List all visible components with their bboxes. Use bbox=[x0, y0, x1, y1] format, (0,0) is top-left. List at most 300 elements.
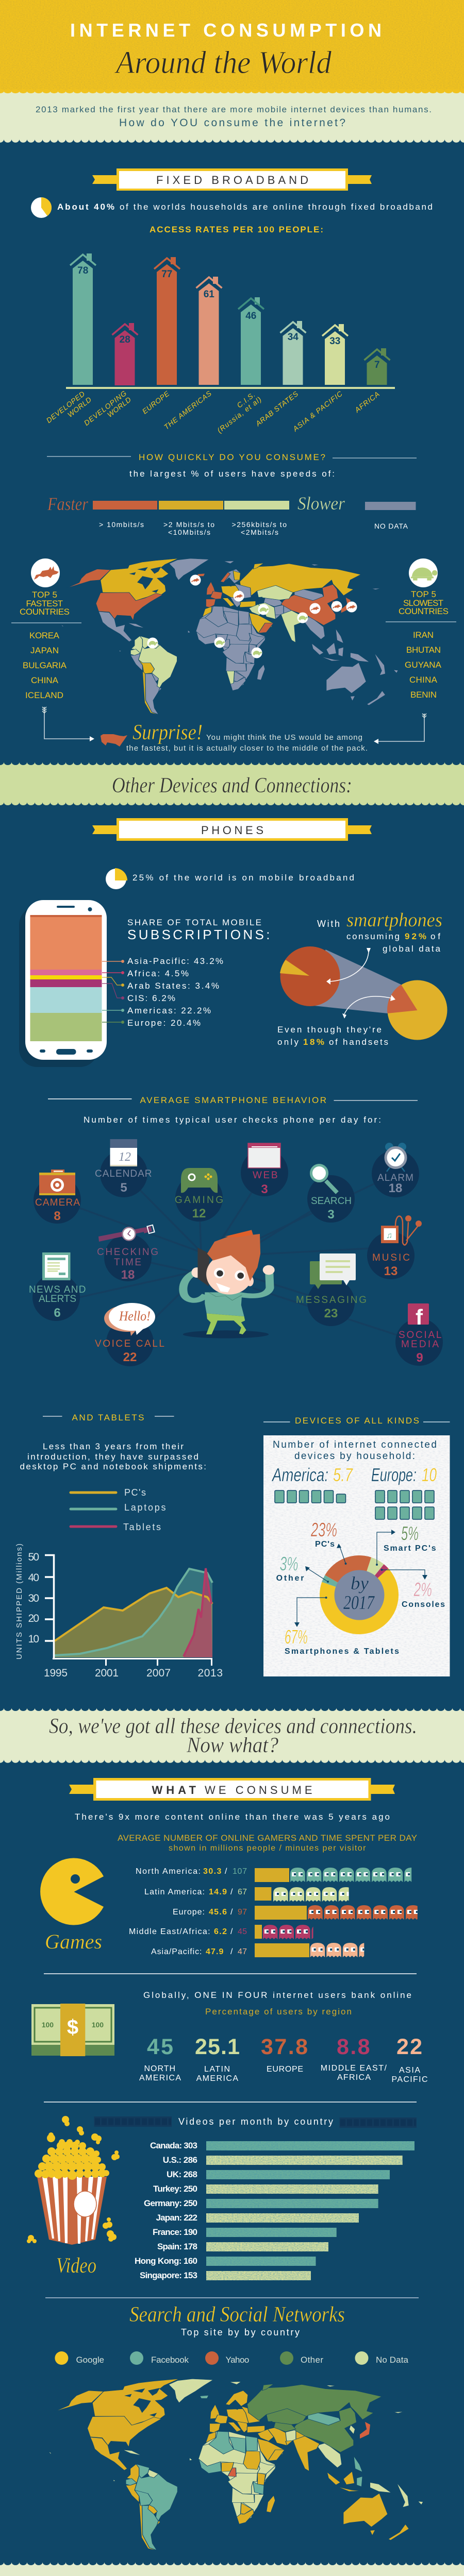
item: web count: 3 bbox=[261, 1182, 268, 1196]
banking headings bbox=[143, 1990, 411, 2016]
chart: units shipped bbox=[15, 1544, 223, 1679]
smartphones text: global data bbox=[383, 944, 441, 954]
panel heading: Number of internet connected bbox=[273, 1439, 437, 1450]
icon: calendar bbox=[110, 1139, 137, 1166]
smartphones text: consuming bbox=[346, 931, 400, 941]
row: north america: 107 bbox=[233, 1867, 247, 1876]
row: middle east and africa: Middle East/Africa: bbox=[129, 1927, 210, 1936]
axis labels: THE AMERICAS bbox=[162, 389, 213, 431]
speed legend: <2Mbits/s bbox=[241, 528, 278, 536]
house bar: africa bbox=[364, 348, 390, 385]
games label: Games bbox=[45, 1930, 102, 1953]
subscriptions legend: Africa: 4.5% bbox=[127, 969, 189, 978]
house bar: arab states: 34 bbox=[288, 332, 299, 343]
icon: rabbit bbox=[31, 558, 60, 587]
house bar: europe bbox=[154, 257, 180, 385]
band: footer divider bbox=[0, 2562, 464, 2576]
icon: message bubbles bbox=[310, 1253, 356, 1289]
chart: units shipped: 20 bbox=[28, 1613, 39, 1624]
smartphones text: 92% bbox=[405, 931, 426, 941]
illustration: popcorn bbox=[27, 2116, 120, 2245]
smartphones text: With bbox=[317, 919, 340, 929]
item: alarm count: ALARM bbox=[377, 1173, 413, 1183]
item: checking time count bbox=[97, 1247, 158, 1282]
panel: top 5 slowest: BENIN bbox=[410, 690, 437, 700]
house bar: developed world: 78 bbox=[77, 265, 88, 276]
banner: phones: PHONES bbox=[201, 824, 263, 837]
chart: videos per month: Hong Kong: 160 bbox=[135, 2256, 197, 2266]
america and europe counts: 5.7 bbox=[333, 1464, 354, 1485]
row: europe: / bbox=[230, 1908, 233, 1917]
tablets text: desktop PC and notebook shipments: bbox=[20, 1462, 206, 1471]
axis labels: WORLD bbox=[66, 395, 93, 419]
chart: videos per month: U.S.: 286 bbox=[163, 2155, 197, 2165]
heading: search and social: Top site by by country bbox=[181, 2327, 300, 2337]
item: checking time count: 18 bbox=[121, 1268, 135, 1282]
row: asia pacific: 47.9 bbox=[206, 1947, 223, 1956]
item: messaging count: MESSAGING bbox=[296, 1295, 367, 1306]
panel: top 5 slowest: BHUTAN bbox=[406, 645, 441, 655]
banking stats bbox=[147, 2035, 422, 2059]
icon: news bbox=[42, 1252, 70, 1280]
house bar: asia and pacific: 33 bbox=[329, 336, 340, 347]
speed legend: Faster bbox=[47, 494, 89, 514]
tablets text: Less than 3 years from their bbox=[43, 1442, 184, 1451]
chart: access rates houses bbox=[45, 253, 395, 434]
donut callouts: Consoles bbox=[402, 1600, 445, 1609]
chart: units shipped: 30 bbox=[28, 1592, 39, 1604]
device icons bbox=[275, 1490, 434, 1519]
house bar: the americas: 61 bbox=[204, 289, 214, 300]
behavior subtitle: Number of times typical user checks phone per day for: bbox=[84, 1115, 381, 1125]
chart: units shipped: 2007 bbox=[146, 1667, 171, 1679]
chart: units shipped: 2013 bbox=[198, 1667, 223, 1679]
america and europe counts: 10 bbox=[422, 1464, 437, 1485]
icon: camera bbox=[39, 1170, 75, 1195]
chart: units shipped: 1995 bbox=[44, 1667, 68, 1679]
film strips bbox=[94, 2116, 417, 2128]
panel heading: devices by household: bbox=[294, 1451, 415, 1462]
banking regions: LATIN bbox=[204, 2065, 230, 2074]
row: europe: 97 bbox=[238, 1908, 247, 1917]
legend: top sites bbox=[55, 2351, 409, 2365]
panel: devices of all kinds bbox=[263, 1435, 450, 1676]
banking regions: EUROPE bbox=[267, 2065, 303, 2074]
row: asia pacific: 47 bbox=[238, 1947, 247, 1956]
banking regions: PACIFIC bbox=[392, 2075, 428, 2084]
subscriptions legend: CIS: 6.2% bbox=[127, 993, 175, 1003]
chart: videos per month: Canada: 303 bbox=[150, 2141, 197, 2150]
item: news and alerts count: 6 bbox=[54, 1306, 61, 1320]
intro text bbox=[36, 105, 432, 129]
title: Around the World bbox=[114, 45, 332, 80]
axis labels bbox=[45, 389, 381, 434]
america and europe counts: America: bbox=[271, 1464, 328, 1485]
banking regions: AMERICA bbox=[139, 2074, 181, 2082]
item: calendar count: CALENDAR bbox=[95, 1168, 152, 1179]
banner: what we consume bbox=[69, 1778, 395, 1801]
banking headings: Globally, ONE IN FOUR internet users bank online bbox=[143, 1990, 411, 2000]
icon: pacman bbox=[40, 1858, 104, 1925]
icon: music player bbox=[381, 1215, 422, 1245]
banking regions: ASIA bbox=[399, 2066, 420, 2075]
icon: 40% pie bbox=[31, 197, 52, 218]
banner: what we consume: WHAT bbox=[152, 1784, 196, 1797]
video label: Video bbox=[56, 2254, 96, 2278]
panel: top 5 fastest: KOREA bbox=[29, 631, 60, 640]
icon: hello speech bubble: Hello! bbox=[119, 1309, 151, 1324]
panel: top 5 slowest: IRAN bbox=[413, 630, 434, 640]
panel: top 5 slowest: COUNTRIES bbox=[399, 606, 449, 616]
icon: money stack: 100 bbox=[92, 2021, 104, 2029]
donut callouts: 67% bbox=[285, 1626, 308, 1648]
heading: search and social: Search and Social Networks bbox=[129, 2303, 345, 2327]
icon: money stack bbox=[31, 2004, 114, 2056]
item: voice call count bbox=[95, 1338, 164, 1364]
band: other devices: Other Devices and Connections: bbox=[112, 774, 352, 798]
subscriptions heading bbox=[127, 918, 270, 942]
axis labels: C.I.S. bbox=[235, 390, 257, 410]
banking regions: AFRICA bbox=[337, 2073, 371, 2082]
item: web count bbox=[253, 1170, 277, 1196]
title bbox=[70, 20, 382, 80]
banner: fixed broadband bbox=[92, 168, 372, 191]
heading: search and social bbox=[129, 2303, 345, 2337]
panel: top 5 fastest bbox=[11, 558, 81, 700]
item: voice call count: VOICE CALL bbox=[95, 1338, 164, 1349]
map markers: rabbits and turtles bbox=[147, 575, 357, 658]
callout: surprise bbox=[126, 721, 368, 753]
banner: what we consume: WE CONSUME bbox=[205, 1784, 312, 1797]
banking stats: 8.8 bbox=[337, 2035, 370, 2059]
legend: top sites: Facebook bbox=[151, 2355, 189, 2365]
mobile broadband stat: 25% of the world is on mobile broadband bbox=[132, 873, 354, 883]
arrow: fastest to surprise bbox=[42, 707, 94, 741]
callout: surprise: Surprise! bbox=[132, 721, 203, 744]
band: now what: Now what? bbox=[186, 1734, 278, 1757]
heading: smartphone behavior: AVERAGE SMARTPHONE BEHAVIOR bbox=[140, 1095, 326, 1105]
illustration: man on the phone bbox=[183, 1230, 275, 1338]
speed legend: >256kbits/s to bbox=[232, 520, 287, 529]
chart legend: Laptops bbox=[124, 1502, 166, 1513]
house bar: cis: 46 bbox=[245, 311, 256, 321]
item: calendar count: 5 bbox=[120, 1181, 127, 1195]
subscriptions legend bbox=[102, 956, 223, 1028]
row: north america bbox=[136, 1867, 419, 1882]
heading: and tablets: AND TABLETS bbox=[72, 1413, 144, 1422]
item: music count bbox=[372, 1252, 410, 1278]
subscriptions legend: Arab States: 3.4% bbox=[127, 981, 219, 991]
chart: videos per month: Spain: 178 bbox=[157, 2242, 197, 2251]
axis labels: AFRICA bbox=[353, 390, 381, 414]
speed legend: > 10mbits/s bbox=[99, 520, 144, 529]
icon: US bbox=[101, 734, 127, 747]
donut callouts: 5% bbox=[401, 1523, 419, 1545]
house bar: developing world: 28 bbox=[120, 334, 130, 345]
speed legend: >2 Mbits/s to bbox=[163, 520, 214, 529]
chart: by 2017 donut: by bbox=[351, 1573, 369, 1594]
donut callouts: 2% bbox=[413, 1579, 432, 1601]
access rates heading: ACCESS RATES PER 100 PEOPLE: bbox=[150, 225, 323, 234]
banking regions: AMERICA bbox=[196, 2074, 238, 2083]
subscriptions heading: SHARE OF TOTAL MOBILE bbox=[127, 918, 261, 927]
header band bbox=[0, 0, 464, 139]
chart: units shipped: UNITS SHIPPED (Millions) bbox=[15, 1544, 24, 1659]
donut callouts: Other bbox=[276, 1574, 304, 1583]
row: north america: / bbox=[225, 1867, 227, 1876]
smartphones text bbox=[317, 909, 442, 954]
item: gaming count: 12 bbox=[192, 1207, 206, 1221]
banking stats: 25.1 bbox=[195, 2035, 240, 2059]
speed legend: NO DATA bbox=[374, 522, 408, 530]
item: gaming count bbox=[175, 1195, 223, 1221]
chart: units shipped: 40 bbox=[28, 1572, 39, 1584]
row: latin america bbox=[144, 1887, 353, 1902]
panel: top 5 fastest: CHINA bbox=[31, 675, 59, 685]
chart: videos per month bbox=[135, 2141, 415, 2280]
band: now what bbox=[0, 1708, 464, 1759]
row: latin america: / bbox=[230, 1888, 233, 1896]
chart: videos per month: Singapore: 153 bbox=[140, 2270, 197, 2280]
icon: money stack: 100 bbox=[42, 2021, 54, 2029]
chart: videos per month: Germany: 250 bbox=[144, 2198, 197, 2208]
house bar: africa: 7 bbox=[374, 360, 380, 370]
connection lines bbox=[56, 1173, 419, 1343]
item: gaming count: GAMING bbox=[175, 1195, 223, 1206]
donut callouts bbox=[276, 1519, 445, 1656]
panel: top 5 fastest: JAPAN bbox=[30, 646, 59, 655]
item: alarm count bbox=[377, 1173, 413, 1195]
chart: videos per month: Japan: 222 bbox=[156, 2213, 197, 2223]
heading: devices of all kinds: DEVICES OF ALL KINDS bbox=[295, 1416, 419, 1426]
house bar: asia and pacific bbox=[322, 324, 348, 385]
item: web count: WEB bbox=[253, 1170, 277, 1181]
axis labels: ARAB STATES bbox=[254, 389, 300, 428]
callout: surprise: You might think the US would be among bbox=[206, 733, 362, 742]
banking headings: Percentage of users by region bbox=[205, 2007, 352, 2016]
house bar: developed world bbox=[70, 253, 96, 385]
panel: top 5 slowest: TOP 5 bbox=[411, 589, 436, 599]
panel: top 5 slowest: CHINA bbox=[409, 675, 438, 685]
subscriptions legend: Asia-Pacific: 43.2% bbox=[127, 956, 223, 966]
chart: data vs handsets cone bbox=[280, 946, 448, 1040]
intro text: 2013 marked the first year that there are more mobile internet devices than humans. bbox=[36, 105, 432, 114]
callout: surprise: the fastest, but it is actually closer to the middle of the pack. bbox=[126, 744, 368, 753]
chart: units shipped: 50 bbox=[28, 1551, 39, 1563]
gamers heading bbox=[118, 1833, 417, 1853]
row: latin america: 67 bbox=[238, 1888, 247, 1896]
icon: watch bbox=[98, 1225, 155, 1242]
chart: gamers by region bbox=[129, 1867, 421, 1957]
item: alarm count: 18 bbox=[389, 1181, 402, 1195]
arrow: slowest to surprise bbox=[374, 714, 426, 744]
item: messaging count bbox=[296, 1295, 367, 1320]
item: camera count: 8 bbox=[54, 1209, 61, 1223]
axis labels: (Russia, et al) bbox=[216, 395, 263, 434]
tablets text bbox=[20, 1442, 206, 1471]
chart: by 2017 donut: 2017 bbox=[343, 1592, 375, 1614]
icon: alarm clock bbox=[385, 1143, 406, 1172]
row: middle east and africa: / bbox=[230, 1927, 233, 1936]
handset text: of handsets bbox=[329, 1037, 388, 1047]
item: social media count bbox=[399, 1330, 441, 1365]
speed subtitle: the largest % of users have speeds of: bbox=[129, 469, 335, 479]
gamers heading: shown in millions people / minutes per visitor bbox=[169, 1844, 366, 1853]
fixed broadband stat: About 40% bbox=[57, 202, 114, 212]
speed legend: Slower bbox=[297, 493, 345, 514]
item: news and alerts count: NEWS AND bbox=[29, 1284, 86, 1295]
axis labels: EUROPE bbox=[141, 389, 171, 415]
icon: facebook: f bbox=[416, 1305, 423, 1329]
icon: web window bbox=[248, 1143, 280, 1168]
row: north america: 30.3 bbox=[203, 1867, 221, 1876]
item: social media count: SOCIAL bbox=[399, 1330, 441, 1341]
legend: top sites: No Data bbox=[376, 2355, 409, 2365]
axis labels: DEVELOPING bbox=[82, 389, 128, 427]
row: middle east and africa: 45 bbox=[238, 1927, 247, 1936]
axis labels: ASIA & PACIFIC bbox=[291, 389, 344, 433]
speed legend: <10Mbits/s bbox=[168, 528, 210, 536]
icon: facebook bbox=[408, 1303, 429, 1329]
item: music count: MUSIC bbox=[372, 1252, 410, 1263]
row: north america: North America: bbox=[136, 1867, 201, 1876]
banking regions bbox=[139, 2064, 428, 2084]
item: voice call count: 22 bbox=[123, 1350, 137, 1364]
illustration: phone with subscription bars bbox=[19, 900, 107, 1067]
band: now what: So, we've got all these devices and connections. bbox=[49, 1715, 417, 1738]
row: middle east and africa bbox=[129, 1925, 326, 1939]
row: middle east and africa: 6.2 bbox=[214, 1927, 227, 1936]
donut callouts: Smartphones & Tablets bbox=[285, 1647, 399, 1656]
banking regions: MIDDLE EAST/ bbox=[321, 2064, 387, 2073]
america and europe counts: Europe: bbox=[371, 1464, 417, 1485]
chart: videos per month: France: 190 bbox=[153, 2227, 197, 2237]
axis labels: DEVELOPED bbox=[45, 389, 86, 425]
handset text bbox=[277, 1025, 388, 1047]
item: search count: 3 bbox=[327, 1208, 335, 1222]
item: camera count bbox=[35, 1197, 80, 1223]
donut callouts: 23% bbox=[310, 1519, 337, 1541]
legend: top sites: Yahoo bbox=[226, 2355, 249, 2365]
tablets text: introduction, they have surpassed bbox=[27, 1452, 198, 1462]
banner: phones bbox=[92, 818, 372, 841]
panel: top 5 slowest bbox=[386, 558, 456, 700]
icon: magnifier bbox=[311, 1165, 337, 1193]
banking regions: NORTH bbox=[144, 2064, 175, 2073]
axis labels: WORLD bbox=[106, 395, 132, 419]
chart legend bbox=[71, 1487, 166, 1532]
panel: top 5 fastest: TOP 5 bbox=[32, 590, 57, 600]
item: calendar count bbox=[95, 1168, 152, 1195]
content stat: There's 9x more content online than there was 5 years ago bbox=[75, 1812, 390, 1822]
banking stats: 37.8 bbox=[261, 2035, 308, 2059]
panel: top 5 slowest: GUYANA bbox=[405, 660, 442, 670]
panel: top 5 fastest: BULGARIA bbox=[23, 660, 67, 670]
panel heading bbox=[273, 1439, 437, 1462]
item: social media count: 9 bbox=[416, 1351, 423, 1365]
row: latin america: 14.9 bbox=[209, 1888, 227, 1896]
row: latin america: Latin America: bbox=[144, 1888, 205, 1896]
row: europe bbox=[173, 1905, 421, 1920]
row: asia pacific: / bbox=[230, 1947, 233, 1956]
video heading: Videos per month by country bbox=[178, 2116, 333, 2127]
item: camera count: CAMERA bbox=[35, 1197, 80, 1208]
icon: turtle bbox=[409, 558, 438, 587]
chart legend: Tablets bbox=[123, 1522, 161, 1532]
gamers heading: AVERAGE NUMBER OF ONLINE GAMERS AND TIME SPENT PER DAY bbox=[118, 1833, 417, 1843]
item: checking time count: TIME bbox=[114, 1257, 141, 1268]
icon: 25% pie bbox=[106, 868, 127, 889]
item: music count: 13 bbox=[384, 1264, 397, 1278]
speed legend bbox=[47, 493, 416, 536]
banner: fixed broadband: FIXED BROADBAND bbox=[156, 174, 308, 187]
panel: top 5 fastest: ICELAND bbox=[25, 690, 63, 700]
chart: by 2017 donut bbox=[320, 1555, 399, 1634]
legend: top sites: Other bbox=[301, 2355, 323, 2365]
item: news and alerts count: ALERTS bbox=[39, 1294, 76, 1304]
map: top site by country bbox=[47, 2379, 423, 2551]
icon: money stack: $ bbox=[67, 2016, 78, 2039]
item: social media count: MEDIA bbox=[401, 1339, 439, 1350]
subscriptions heading: SUBSCRIPTIONS: bbox=[127, 927, 270, 942]
banking stats: 22 bbox=[396, 2035, 422, 2059]
icon: hello speech bubble bbox=[104, 1303, 155, 1336]
chart: videos per month: Turkey: 250 bbox=[153, 2184, 197, 2194]
icon: calendar: 12 bbox=[119, 1150, 131, 1164]
house bar: cis bbox=[238, 297, 264, 385]
row: asia pacific bbox=[151, 1943, 374, 1957]
chart legend: PC's bbox=[124, 1487, 146, 1498]
panel: top 5 fastest: COUNTRIES bbox=[20, 607, 70, 617]
donut callouts: PC's bbox=[315, 1540, 335, 1549]
heading: how quickly: HOW QUICKLY DO YOU CONSUME? bbox=[139, 452, 325, 462]
map: broadband speed by country bbox=[59, 558, 398, 715]
donut callouts: 3% bbox=[279, 1553, 298, 1575]
subscriptions legend: Americas: 22.2% bbox=[127, 1006, 211, 1015]
house bar: developing world bbox=[112, 323, 138, 385]
america and europe counts bbox=[271, 1464, 437, 1485]
smartphones text: of bbox=[430, 931, 440, 941]
icon: music player: ♫ bbox=[386, 1231, 392, 1240]
item: messaging count: 23 bbox=[324, 1307, 338, 1320]
behavior circles bbox=[32, 1149, 443, 1366]
row: europe: Europe: bbox=[173, 1908, 205, 1917]
legend: top sites: Google bbox=[76, 2355, 104, 2365]
row: europe: 45.6 bbox=[209, 1908, 227, 1917]
subscriptions legend: Europe: 20.4% bbox=[127, 1018, 201, 1028]
house bar: the americas bbox=[196, 277, 222, 385]
panel: top 5 fastest: FASTEST bbox=[26, 599, 63, 608]
donut callouts: Smart PC's bbox=[384, 1544, 436, 1553]
banking stats: 45 bbox=[147, 2035, 173, 2059]
house bar: europe: 77 bbox=[161, 269, 172, 280]
icon: game controller bbox=[181, 1168, 218, 1193]
item: news and alerts count bbox=[29, 1284, 86, 1320]
chart: videos per month: UK: 268 bbox=[167, 2170, 197, 2179]
fixed broadband stat: of the worlds households are online through fixed broadband bbox=[120, 202, 433, 212]
handset text: Even though they're bbox=[277, 1025, 382, 1035]
item: search count bbox=[311, 1196, 352, 1222]
band: other devices bbox=[0, 762, 464, 802]
intro text: How do YOU consume the internet? bbox=[119, 117, 345, 129]
row: asia pacific: Asia/Pacific: bbox=[151, 1947, 202, 1956]
chart: units shipped: 2001 bbox=[95, 1667, 119, 1679]
panel: top 5 slowest: SLOWEST bbox=[403, 598, 443, 608]
handset text: only bbox=[277, 1037, 299, 1047]
item: checking time count: CHECKING bbox=[97, 1247, 158, 1258]
smartphones text: smartphones bbox=[346, 909, 442, 931]
chart: units shipped: 10 bbox=[28, 1633, 39, 1645]
